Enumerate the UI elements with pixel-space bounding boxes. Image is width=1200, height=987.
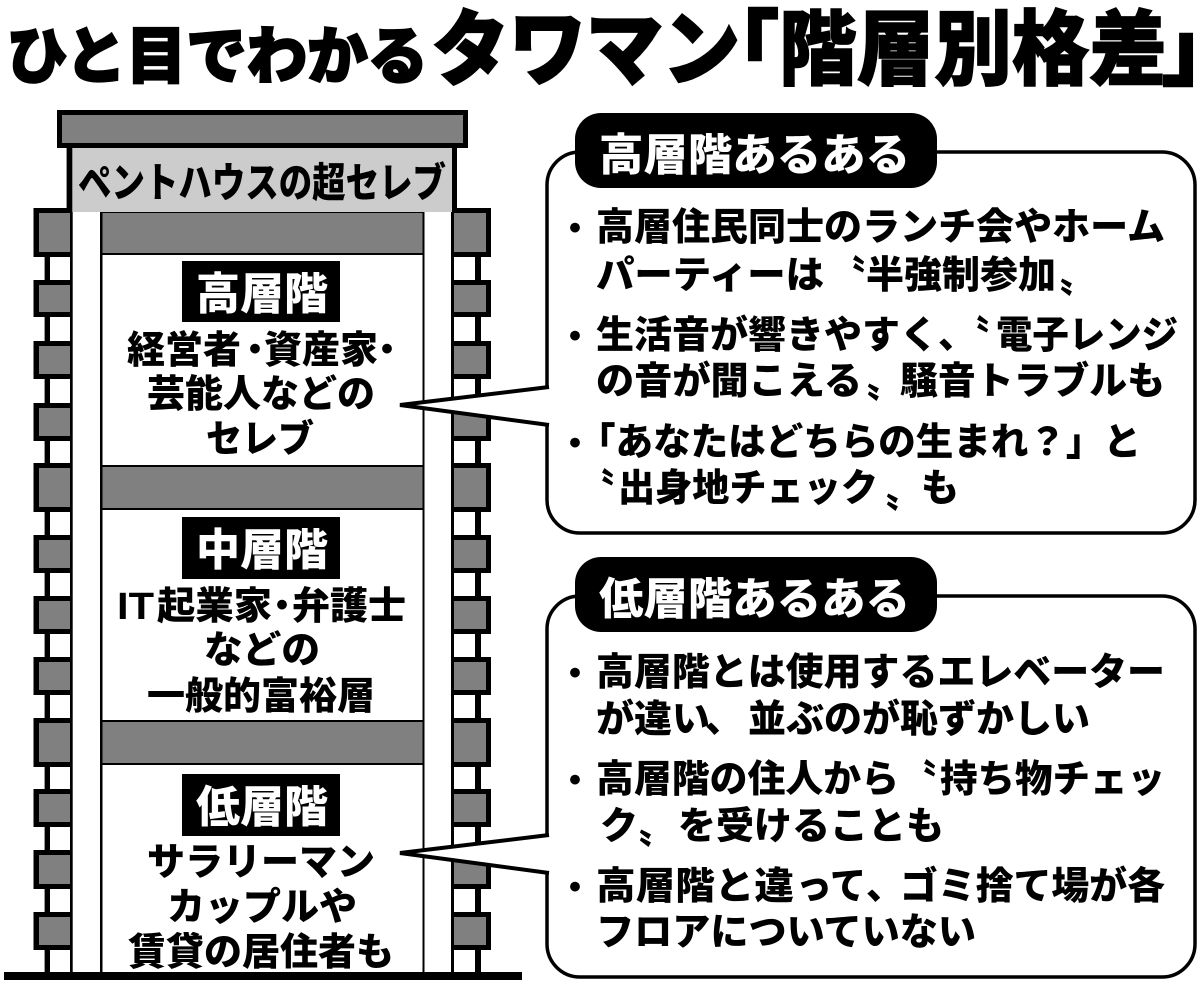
text block: high floor bullets: 騒音トラブルも — [900, 360, 1165, 403]
heading pill: high floor — [575, 113, 937, 188]
title: ひと目でわかる — [7, 23, 428, 92]
panel: low floor callout — [400, 557, 1195, 977]
middle floor residents: ・ — [263, 586, 301, 628]
right wall blocks — [452, 208, 491, 950]
text block: high floor bullets: 〟 — [1059, 259, 1097, 301]
heading pill: low floor: 低層階あるある — [599, 575, 910, 624]
title: 「 — [697, 5, 779, 96]
text block: high floor bullets: パーティーは — [596, 255, 824, 297]
callout tail: high floor — [400, 387, 549, 425]
low floor label — [182, 774, 340, 836]
text block: low floor bullets: ・ — [556, 868, 594, 910]
tower building — [4, 110, 522, 980]
middle floor residents: などの — [204, 630, 320, 672]
text block: low floor bullets: 高層階と違 — [596, 866, 794, 908]
text block: low floor bullets: 〝 — [899, 759, 937, 801]
penthouse: ペントハウスの超セレブ — [78, 160, 446, 206]
high floor residents — [127, 330, 406, 461]
callout tail: low floor — [400, 835, 549, 873]
text block: high floor bullets — [556, 207, 1178, 516]
middle floor residents: 起業家 — [157, 586, 272, 628]
title: タワマン — [432, 5, 740, 96]
high floor label — [182, 261, 340, 322]
text block: low floor bullets: 〟 — [638, 810, 676, 852]
text block: low floor bullets: 並ぶのが恥ずかしい — [748, 698, 1090, 741]
text block: high floor bullets: ・ — [556, 209, 594, 251]
high floor residents: ・ — [236, 330, 274, 372]
roof — [57, 110, 468, 148]
text block: high floor bullets: 〟 — [885, 474, 923, 516]
text block: low floor bullets: 、 — [866, 866, 904, 908]
text block: high floor bullets: 〝 — [577, 468, 615, 510]
text block: low floor bullets: を受けることも — [678, 806, 944, 848]
text block: high floor bullets: 電子レンジ — [996, 315, 1178, 357]
middle floor label: 中層階 — [196, 526, 328, 575]
penthouse — [67, 147, 457, 212]
floor bands — [102, 211, 422, 765]
side ladder rails — [45, 212, 481, 972]
high floor residents: 資産家 — [264, 330, 378, 372]
low floor residents: カップルや — [167, 887, 357, 929]
text block: high floor bullets: 高層住民同士のランチ会やホーム — [596, 207, 1165, 249]
low floor residents: 賃貸の居住者も — [128, 932, 394, 974]
high floor residents: 芸能人などの — [147, 374, 375, 416]
heading pill: low floor — [575, 557, 937, 632]
middle floor residents: 弁護士 — [292, 586, 406, 628]
text block: high floor bullets: 出身地チェック — [618, 468, 878, 510]
heading pill: high floor: 高層階あるある — [599, 131, 910, 180]
low floor label: 低層階 — [196, 783, 328, 832]
text block: high floor bullets: ・ — [556, 424, 594, 466]
text block: high floor bullets: 「あなたはどちらの生まれ？」と — [578, 422, 1141, 464]
text block: high floor bullets: 生活音が響きやすく、 — [596, 314, 976, 357]
ground line — [4, 972, 522, 980]
text block: high floor bullets: ・ — [556, 317, 594, 359]
high floor residents: ・ — [368, 330, 406, 372]
text block: low floor bullets: 高層階とは使用するエレベーター — [596, 652, 1165, 694]
text block: low floor bullets: 高層階の住人から — [596, 759, 899, 801]
title — [7, 5, 1200, 96]
text block: low floor bullets: 持ち物チェッ — [940, 759, 1165, 801]
text block: low floor bullets: 、 — [705, 699, 743, 741]
low floor residents: サラリーマン — [147, 842, 375, 884]
low floor residents — [128, 842, 394, 974]
text block: low floor bullets: って — [796, 866, 866, 908]
left wall blocks — [34, 208, 72, 950]
high floor label: 高層階 — [196, 270, 328, 319]
text block: high floor bullets: 〝 — [828, 255, 866, 297]
text block: low floor bullets: ・ — [556, 654, 594, 696]
text block: low floor bullets: フロアについていない — [596, 912, 976, 954]
text block: low floor bullets: ク — [600, 806, 638, 848]
tower shaft — [70, 212, 454, 972]
text block: high floor bullets: の音が聞こえる — [596, 360, 862, 403]
text block: low floor bullets: ゴミ捨て場が各 — [900, 865, 1165, 908]
high floor residents: 経営者 — [127, 330, 241, 372]
text block: low floor bullets — [556, 652, 1165, 954]
text block: high floor bullets: 〟 — [866, 364, 904, 406]
text block: low floor bullets: が違い — [596, 698, 710, 741]
text block: high floor bullets: 〝 — [952, 315, 990, 357]
middle floor label — [182, 517, 340, 579]
text block: high floor bullets: 半強制参加 — [866, 255, 1056, 297]
middle floor residents: IT — [117, 586, 154, 628]
high floor residents: セレブ — [206, 418, 314, 461]
middle floor residents: 一般的富裕層 — [147, 676, 375, 718]
panel: high floor callout — [400, 113, 1195, 533]
middle floor residents — [117, 586, 406, 718]
title: 階層別格差 — [779, 5, 1167, 96]
text block: low floor bullets: ・ — [556, 761, 594, 803]
text block: high floor bullets: も — [921, 468, 959, 510]
